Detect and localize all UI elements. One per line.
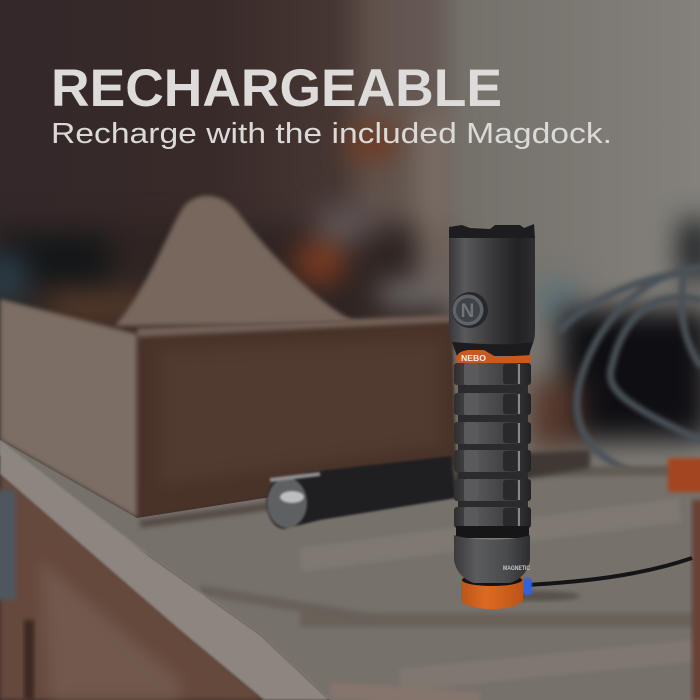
crenellated bezel [449,224,535,238]
flashlight base [454,535,530,583]
grip ring 3 [454,422,531,444]
crate front [137,316,456,518]
lower left blurred patch [40,560,180,700]
blurred orange object [668,458,700,492]
table shadow and grain [140,470,700,700]
grip ring 2 [454,393,531,415]
wooden crate [0,299,456,518]
flashlight [449,224,692,609]
NEBO logo: NEBO [461,354,486,363]
grip ring 6 [454,507,531,528]
grip ring 5 [454,479,531,501]
subheading: Recharge with the included Magdock. [51,118,612,150]
table edge band [0,440,330,700]
orange magdock puck [461,578,523,609]
magnetic label: MAGNETIC [503,565,530,572]
grip ring 4 [454,450,531,472]
blurred workshop background [0,110,700,482]
power button: N [461,301,474,322]
blue grey blurred post [0,490,16,600]
blue charging LED [523,578,532,595]
crate left side [0,299,137,518]
grip section [454,362,531,538]
dark slot lower left [24,620,34,700]
charging cable [527,558,692,585]
dark gap above puck [462,574,522,586]
right foreground edge [692,500,700,700]
crate rim [137,315,452,337]
table front side [0,470,265,700]
power button [452,292,488,328]
heading: RECHARGEABLE [51,59,502,118]
table top [0,440,700,700]
dark chamfer [452,342,533,356]
flashlight head [449,238,535,356]
grip ring 1 [454,363,531,385]
contact shadow [500,591,580,601]
orange collar [456,350,532,363]
cables [560,268,700,482]
cone shaped object [115,196,358,326]
lying flashlight [266,450,590,529]
